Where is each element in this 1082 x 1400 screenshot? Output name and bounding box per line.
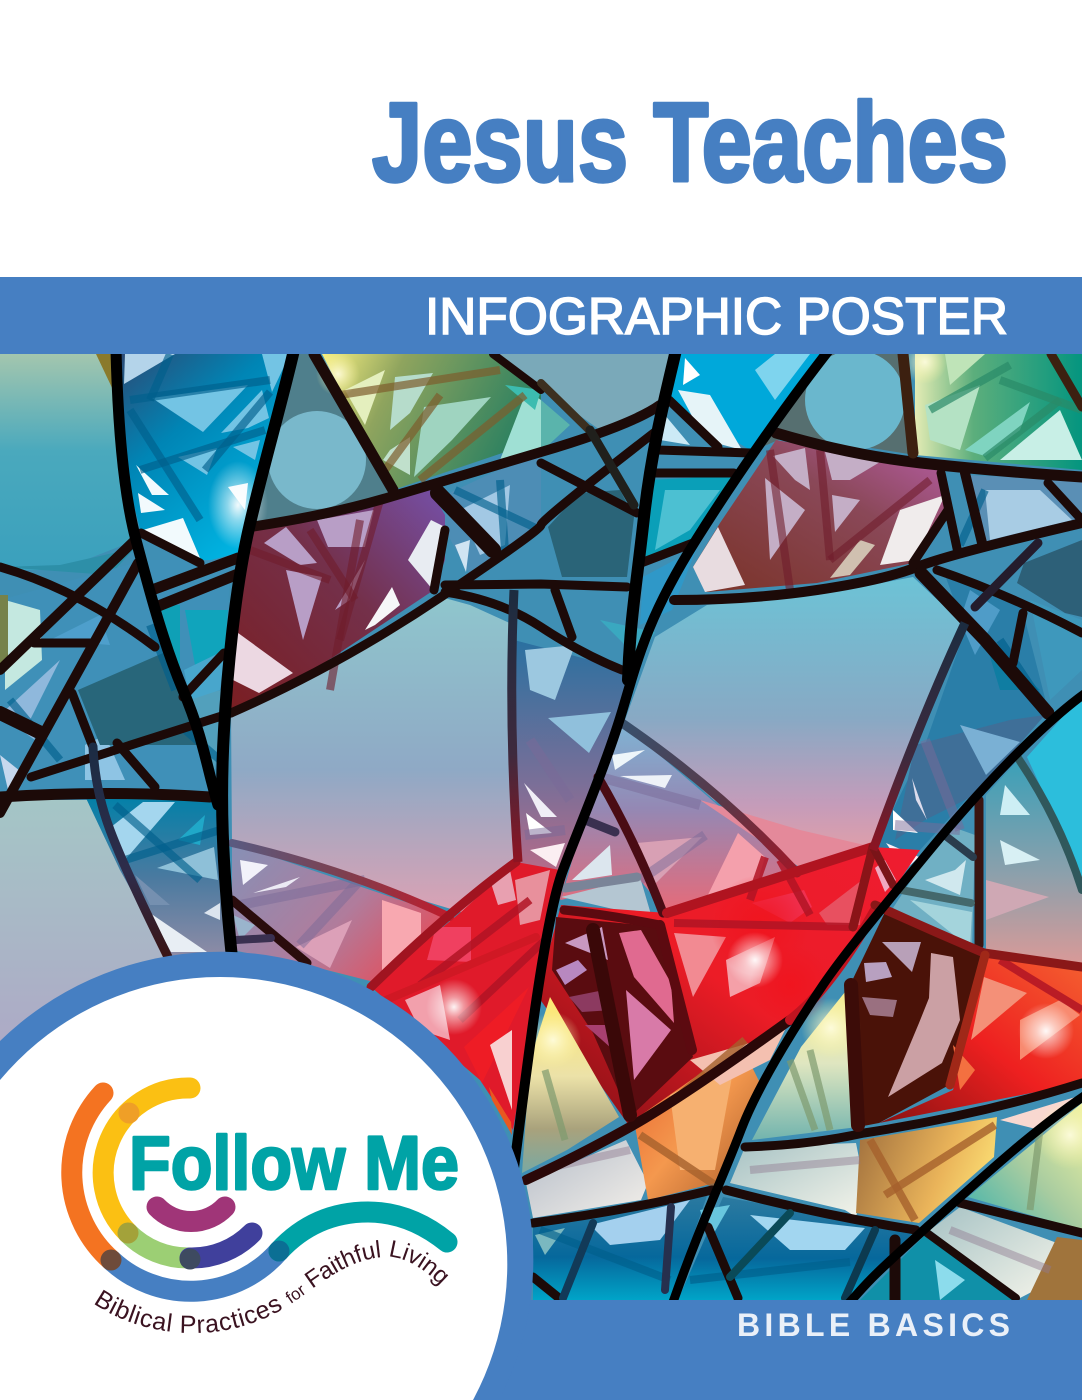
dark lead lines xyxy=(0,354,1082,1300)
logo arcs xyxy=(72,1088,447,1291)
right blue mosaic xyxy=(873,475,1082,963)
fading leads running through the light cells xyxy=(512,590,965,862)
smooth glass cells xyxy=(0,350,1082,1060)
yellow green mosaic xyxy=(322,354,541,490)
blue circle ring xyxy=(0,952,533,1400)
blue mosaic left xyxy=(0,560,230,800)
stained glass illustration xyxy=(0,340,1082,1305)
blue mosaic top left xyxy=(120,354,293,563)
yellow orange and pale panes xyxy=(522,987,1082,1300)
purple red mosaic xyxy=(231,490,445,713)
pink mesh under centre cell xyxy=(232,723,873,985)
blue mosaic top centre xyxy=(660,354,827,450)
white logo circle xyxy=(0,977,507,1400)
translucent inner mesh strokes xyxy=(10,354,1082,1280)
logo: Follow Me xyxy=(61,1078,459,1333)
logo tagline: Biblical Practices for Faithful Living xyxy=(94,1240,448,1333)
blue footer bar xyxy=(470,1300,1082,1400)
blue mesh above logo ring xyxy=(86,798,230,957)
blue panes along bottom xyxy=(533,1193,1016,1300)
mauve brown mosaic xyxy=(693,440,948,592)
subtitle: INFOGRAPHIC POSTER xyxy=(425,288,1008,346)
central column mosaic xyxy=(514,475,740,900)
red glass band xyxy=(371,825,1082,1135)
footer label: BIBLE BASICS xyxy=(737,1307,1010,1343)
subtitle band xyxy=(0,277,1082,354)
green mosaic top right xyxy=(915,354,1082,470)
blue mosaic centre top xyxy=(445,450,541,575)
logo wordmark: Follow Me xyxy=(129,1121,459,1206)
logo overlap dots xyxy=(100,1102,290,1270)
glowing highlights xyxy=(316,340,1082,1169)
black lead lines xyxy=(116,350,1082,1305)
